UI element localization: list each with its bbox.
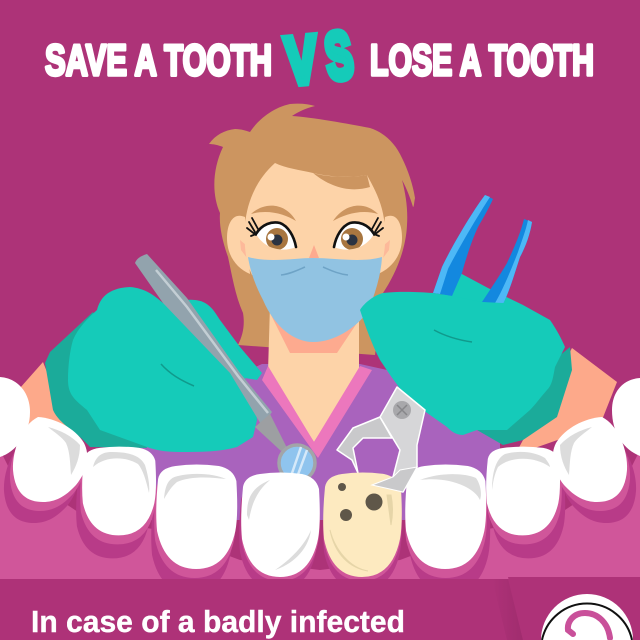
ears bbox=[227, 216, 402, 274]
far left tooth bbox=[0, 377, 30, 457]
forceps right jaw bbox=[372, 387, 425, 492]
glove hand right bbox=[360, 292, 565, 435]
forceps left jaw bbox=[337, 417, 392, 473]
glove cuff left bbox=[45, 312, 147, 448]
cavities bbox=[338, 483, 382, 521]
teeth bbox=[0, 377, 640, 577]
glove finger behind tweezers bbox=[440, 273, 523, 330]
dental probe with mirror bbox=[135, 254, 315, 481]
intro text: In case of a badly infected bbox=[31, 604, 405, 639]
tooth 6 bbox=[405, 464, 486, 569]
far right tooth bbox=[612, 378, 640, 456]
swirl icon circle bbox=[541, 594, 633, 640]
title center: VS: V bbox=[283, 22, 320, 99]
tweezers bbox=[433, 195, 532, 304]
eyes bbox=[247, 218, 383, 250]
probe handle bbox=[135, 254, 272, 426]
title bbox=[45, 17, 594, 99]
arms bbox=[20, 348, 617, 455]
hair bbox=[209, 104, 415, 355]
screw bbox=[393, 401, 411, 419]
probe tip bbox=[255, 414, 287, 451]
surgical glove left bbox=[45, 287, 262, 452]
glove hand left bbox=[68, 287, 262, 452]
eyebrows bbox=[251, 206, 378, 221]
collar bbox=[262, 366, 372, 458]
fringe strand bbox=[313, 173, 370, 189]
tooth 1 bbox=[13, 417, 87, 502]
surgical glove right bbox=[360, 195, 572, 445]
scrubs bbox=[140, 364, 500, 520]
neck shadow bbox=[270, 300, 359, 353]
glove cuff right bbox=[477, 347, 572, 445]
mask bbox=[248, 257, 382, 342]
ribbon tab bbox=[508, 577, 640, 640]
gums bbox=[0, 450, 640, 580]
tooth 8 bbox=[553, 417, 627, 502]
teeth shadows bbox=[4, 438, 636, 593]
title center: VS: S bbox=[321, 17, 357, 94]
title left: save a tooth: SAVE A TOOTH bbox=[45, 36, 272, 85]
ribbon shadow bbox=[492, 579, 523, 640]
decayed tooth bbox=[323, 472, 402, 577]
gum rings bbox=[10, 426, 630, 581]
forceps bbox=[337, 387, 425, 492]
mouth mirror bbox=[279, 445, 315, 481]
dentist bbox=[209, 104, 415, 442]
title center: VS bbox=[283, 17, 357, 99]
face bbox=[245, 163, 385, 275]
tooth 4 bbox=[241, 472, 320, 577]
tooth 7 bbox=[486, 447, 560, 535]
tooth 3 bbox=[156, 464, 237, 569]
tooth 2 bbox=[82, 447, 156, 535]
nose bbox=[309, 245, 319, 258]
neck bbox=[268, 305, 359, 442]
forceps tip over tooth bbox=[372, 467, 417, 492]
bottom panel bbox=[0, 577, 640, 640]
